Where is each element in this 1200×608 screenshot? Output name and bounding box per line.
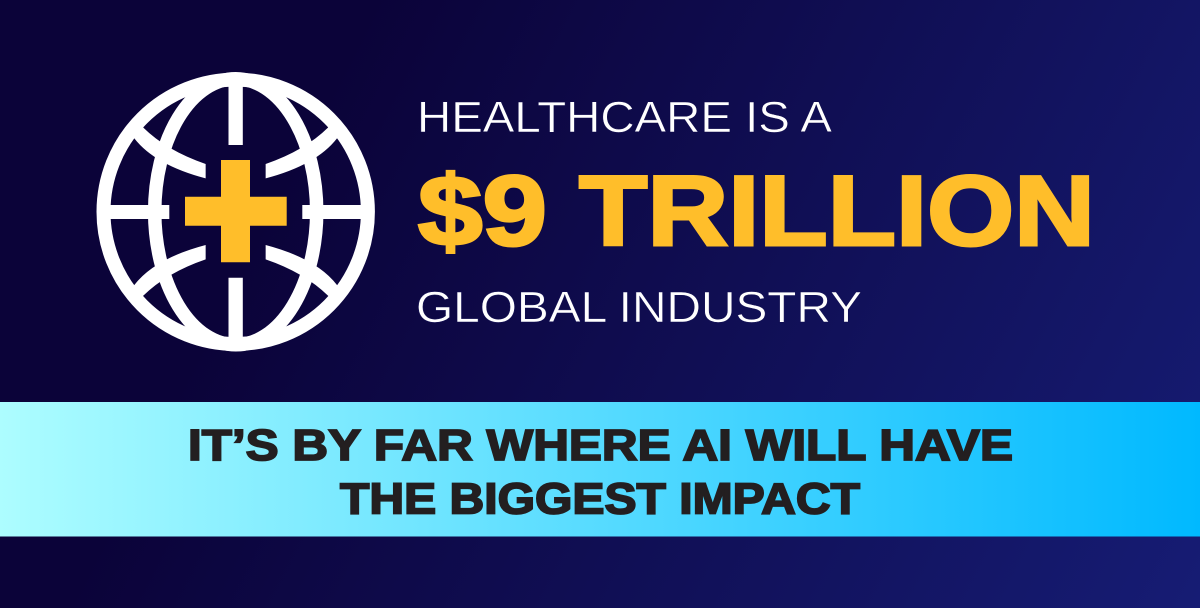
trillion word: TRILLION [579, 155, 1095, 266]
globe vertical spokes [228, 85, 243, 339]
icon: medical cross [185, 160, 287, 262]
banner background [0, 402, 1200, 536]
heading line: global industry: GLOBAL INDUSTRY [416, 284, 862, 332]
globe inner meridian [155, 79, 317, 345]
banner text line 2: THE BIGGEST IMPACT [340, 474, 860, 524]
globe outer ring [104, 80, 368, 344]
heading line: healthcare is a: HEALTHCARE IS A [417, 94, 832, 142]
icon: globe with medical cross [104, 79, 368, 345]
globe horizontal spokes [108, 205, 363, 219]
banner text line 1: IT’S BY FAR WHERE AI WILL HAVE [188, 421, 1013, 470]
headline figure: $9 trillion [418, 155, 1095, 266]
dollar amount: $9 [418, 155, 547, 266]
globe latitude arcs [128, 122, 343, 302]
banner [0, 402, 1200, 536]
